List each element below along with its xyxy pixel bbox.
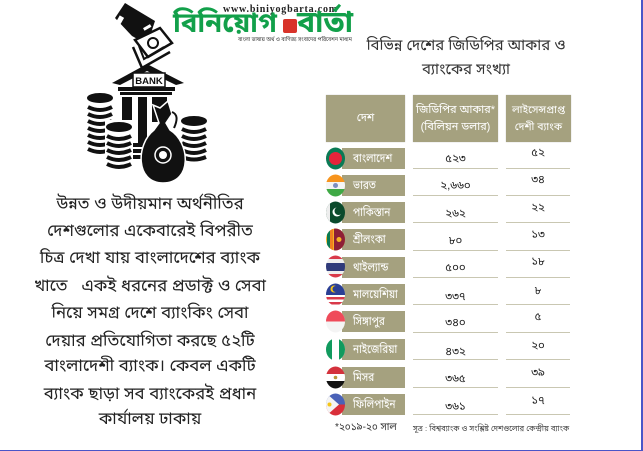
row: Sri Lanka: ১৩ [531, 229, 545, 241]
row: Sri Lanka [326, 228, 570, 251]
logo emblem [283, 19, 297, 33]
logo name second word: বার্তা [297, 6, 353, 39]
header: banks [506, 95, 571, 142]
footnote: year: *২০১৯-২০ সাল [335, 422, 397, 433]
row: Philippines: ফিলিপাইন [353, 397, 395, 411]
header: gdp [413, 95, 498, 142]
row: Bangladesh: ৫২ [531, 147, 545, 159]
table [326, 94, 572, 416]
row: India: ৩৪ [531, 174, 545, 186]
row: Thailand: ৫০০ [445, 262, 466, 274]
row: Malaysia [326, 284, 570, 305]
paragraph: দেয়ার প্রতিযোগিতা করছে ৫২টি [45, 331, 255, 350]
row: Malaysia: ৮ [535, 285, 541, 297]
paragraph: নিয়ে সমগ্র দেশে ব্যাংকিং সেবা [51, 303, 248, 322]
row: Malaysia: ৩৩৭ [445, 291, 466, 303]
row: Egypt: ৩৬৫ [445, 373, 466, 385]
row: Malaysia: মালয়েশিয়া [353, 287, 398, 301]
row: Bangladesh [326, 147, 570, 170]
chart title: ব্যাংকের সংখ্যা [422, 61, 510, 78]
paragraph: চিত্র দেখা যায় বাংলাদেশের ব্যাংক [40, 248, 260, 267]
row: Bangladesh: বাংলাদেশ [353, 151, 392, 165]
row: Philippines: ১৭ [531, 395, 545, 407]
header: banks: লাইসেন্সপ্রাপ্ত [512, 104, 565, 116]
row: Pakistan [326, 202, 570, 224]
icon: bank building [112, 64, 184, 159]
row: Singapore: ৩৪০ [445, 317, 466, 329]
row: India: ভারত [353, 178, 376, 192]
chart title [366, 36, 565, 78]
row: Nigeria: ৪৩২ [445, 346, 466, 358]
paragraph: ব্যাংক ছাড়া সব ব্যাংকেরই প্রধান [44, 384, 256, 403]
row: Pakistan: পাকিস্তান [353, 205, 390, 219]
icon: money bag [141, 101, 185, 183]
icon: bank building: BANK [135, 76, 163, 87]
row: Thailand: ১৮ [531, 256, 545, 268]
row: Singapore [326, 310, 570, 333]
footnote: source: সূত্র : বিশ্বব্যাংক ও সংশ্লিষ্ট দেশগুলোর কেন্দ্রীয় ব্যাংক [413, 424, 569, 433]
header: banks: দেশী ব্যাংক [515, 120, 562, 132]
logo name: বিনিয়োগ [173, 7, 277, 38]
row: India [326, 174, 570, 196]
icon: bank with money [87, 3, 207, 182]
icon: wallet in hand [115, 3, 155, 41]
logo tagline: বাংলা ভাষায় অর্থ ও বাণিজ্য সংবাদের পরিবেশন মাধ্যম [238, 37, 352, 43]
paragraph: কার্যালয় ঢাকায় [99, 409, 201, 428]
row: Nigeria: ২০ [531, 340, 545, 352]
row: Egypt: মিসর [353, 370, 374, 384]
header: country [326, 95, 405, 142]
row: Philippines: ৩৬১ [445, 401, 466, 413]
logo url: www.biniyogbarta.com [223, 4, 338, 15]
row: Sri Lanka: ৮০ [449, 235, 462, 247]
icon: coin stack left [88, 94, 112, 152]
paragraph: দেশগুলোর একেবারেই বিপরীত [47, 221, 253, 240]
header: gdp: জিডিপির আকার* [416, 104, 495, 116]
row: Sri Lanka: শ্রীলংকা [353, 232, 386, 246]
row: Egypt: ৩৯ [531, 367, 545, 379]
logo [172, 4, 354, 43]
icon: coin stack middle [105, 120, 133, 172]
row: Pakistan: ২২ [531, 202, 545, 214]
row: Egypt [326, 366, 570, 388]
paragraph [34, 194, 266, 428]
row: Pakistan: ২৬২ [445, 208, 466, 220]
row: Philippines [326, 394, 570, 416]
row: Singapore: সিঙ্গাপুর [353, 314, 385, 328]
paragraph: বাংলাদেশী ব্যাংক। কেবল একটি [44, 356, 256, 375]
paragraph: খাতে একই ধরনের প্রডাক্ট ও সেবা [34, 276, 266, 295]
chart title: বিভিন্ন দেশের জিডিপির আকার ও [367, 37, 565, 54]
row: Singapore: ৫ [535, 311, 541, 323]
icon: coin stack right [182, 117, 206, 160]
row: Thailand: থাইল্যান্ড [353, 260, 388, 274]
row: Bangladesh: ৫২৩ [445, 153, 466, 165]
row: Thailand [326, 256, 570, 278]
icon: banknote [133, 28, 172, 68]
header: gdp: (বিলিয়ন ডলার) [421, 120, 490, 132]
paragraph: উন্নত ও উদীয়মান অর্থনীতির [56, 194, 244, 213]
header: country: দেশ [357, 112, 374, 124]
row: Nigeria: নাইজেরিয়া [353, 342, 397, 356]
row: India: ২,৬৬০ [440, 180, 471, 192]
row: Nigeria [326, 339, 570, 360]
